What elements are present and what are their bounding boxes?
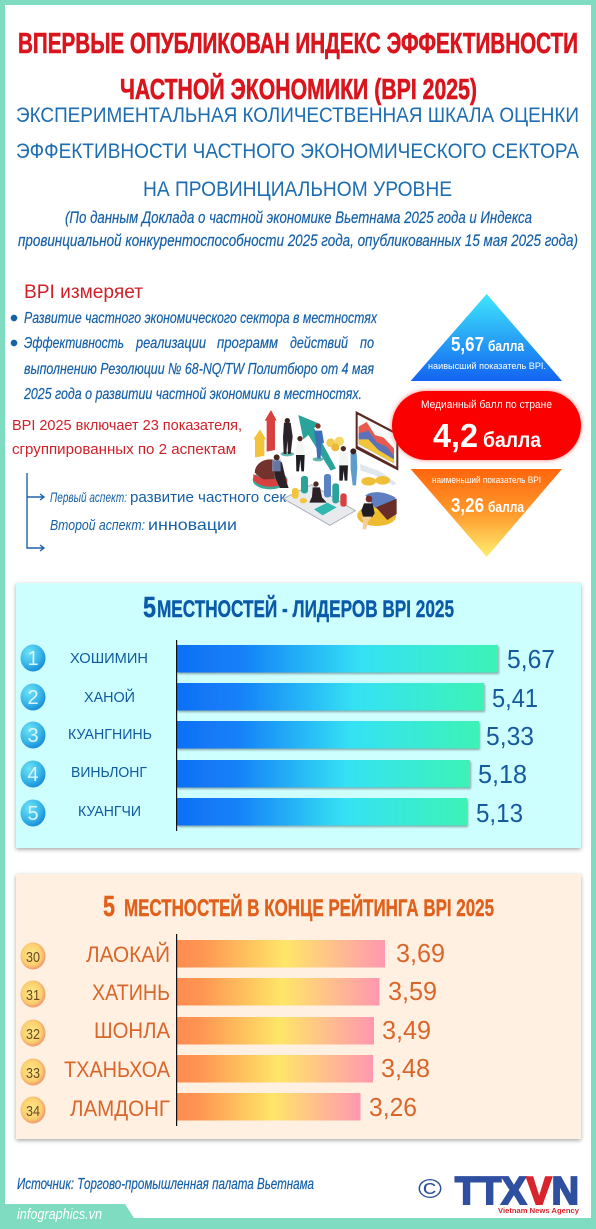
measures list: по: [360, 335, 374, 352]
logo: TTXVN: TTXVN: [455, 1170, 579, 1213]
measures list: Развитие частного экономического сектора в местностях: [24, 310, 378, 327]
rank badges: 30: [26, 949, 40, 966]
national median pill: 4,2: [433, 417, 478, 454]
locality names: ХАТИНЬ: [92, 980, 170, 1005]
rank badges: 3: [27, 725, 39, 747]
highest score triangle: [411, 294, 562, 381]
highest score triangle: 5,67: [451, 334, 484, 356]
panel: bottom 5 localities: [16, 874, 581, 1139]
title: ЧАСТНОЙ ЭКОНОМИКИ (BPI 2025): [120, 72, 477, 106]
bar chart: bottom 5: [176, 934, 385, 1126]
values: top 5: 5,33: [486, 721, 534, 751]
lowest score triangle: [411, 469, 562, 557]
aspects text: [50, 489, 286, 534]
rank badges: 2: [27, 687, 39, 709]
rank badges: 4: [27, 764, 39, 786]
bar chart: top 5: [176, 640, 498, 831]
national median pill: [392, 391, 581, 460]
measures list: [11, 310, 378, 403]
BPI 2025 indicators note: BPI 2025 включает 23 показателя,: [12, 417, 242, 434]
values: bottom 5: 3,59: [388, 976, 437, 1006]
BPI 2025 indicators note: сгруппированных по 2 аспектам: [12, 441, 236, 458]
locality names: [68, 650, 152, 820]
values: bottom 5: [369, 938, 445, 1122]
rank badges: [20, 942, 46, 1124]
heading: top 5: МЕСТНОСТЕЙ - ЛИДЕРОВ BPI 2025: [157, 595, 454, 623]
locality names: ЛАМДОНГ: [70, 1096, 170, 1121]
values: bottom 5: 3,48: [381, 1053, 430, 1083]
highest score triangle: наивысший показатель BPI.: [428, 361, 546, 371]
lowest score triangle: наименьший показатель BPI: [432, 475, 541, 485]
subtitle: НА ПРОВИНЦИАЛЬНОМ УРОВНЕ: [143, 178, 452, 201]
rank badges: [20, 644, 46, 826]
rank badges: 34: [26, 1103, 40, 1120]
rank badges: 1: [27, 648, 39, 670]
measures list: Эффективность: [24, 335, 124, 352]
heading: top 5: [143, 592, 454, 624]
values: top 5: 5,41: [492, 683, 538, 713]
measures list: программ: [217, 335, 278, 352]
locality names: КУАНГНИНЬ: [68, 726, 152, 743]
heading: bottom 5: [103, 891, 494, 923]
copyright symbol: ©: [418, 1174, 442, 1204]
heading: bottom 5: 5: [103, 891, 115, 923]
locality names: ВИНЬЛОНГ: [71, 764, 147, 781]
aspects text: развитие частного сек: [130, 489, 286, 506]
heading: top 5: 5: [143, 592, 156, 624]
locality names: ЛАОКАЙ: [86, 942, 170, 967]
locality names: ТХАНЬХОА: [64, 1057, 170, 1082]
values: top 5: 5,13: [476, 798, 523, 828]
values: bottom 5: 3,49: [382, 1015, 431, 1045]
values: top 5: [476, 644, 555, 828]
subtitle: [16, 104, 579, 201]
measures list: реализации: [135, 335, 206, 352]
aspects text: Второй аспект:: [50, 517, 145, 534]
rank badges: 33: [26, 1065, 40, 1082]
values: bottom 5: 3,69: [396, 938, 445, 968]
measures list: действий: [290, 335, 348, 352]
locality names: ХОШИМИН: [70, 650, 148, 667]
rank badges: 32: [26, 1026, 40, 1043]
source note under the subtitle: [18, 208, 578, 250]
aspects bracket with arrows: [27, 473, 44, 551]
highest score triangle: балла: [488, 338, 525, 355]
footer tab: infographics.vn: [17, 1206, 102, 1223]
rank badges: 31: [26, 987, 40, 1004]
lowest score triangle: балла: [488, 499, 525, 516]
BPI 2025 indicators note: [12, 417, 242, 458]
title: [18, 28, 578, 106]
footer tab: [0, 1204, 134, 1229]
source line: Источник: Торгово-промышленная палата Вьетнама: [17, 1176, 314, 1193]
logo: TTXVN: Vietnam News Agency: [498, 1206, 580, 1215]
aspects text: инновации: [148, 517, 237, 534]
locality names: [64, 942, 170, 1121]
national median pill: Медианный балл по стране: [421, 399, 552, 411]
panel: top 5 localities: [16, 583, 581, 848]
locality names: КУАНГЧИ: [78, 803, 141, 820]
national median pill: балла: [483, 429, 541, 452]
values: top 5: 5,18: [478, 759, 527, 789]
measures list: выполнению Резолюции № 68-NQ/TW Политбюро от 4 мая: [24, 361, 374, 378]
measures list: 2025 года о развитии частной экономики в местностях.: [23, 386, 362, 403]
values: top 5: 5,67: [507, 644, 555, 674]
illustration: business people and charts: [253, 410, 398, 529]
locality names: ШОНЛА: [94, 1018, 170, 1043]
rank badges: 5: [27, 803, 39, 825]
locality names: ХАНОЙ: [84, 688, 135, 706]
heading: BPI measures: BPI измеряет: [24, 282, 143, 303]
aspects text: Первый аспект:: [50, 489, 127, 505]
lowest score triangle: 3,26: [451, 495, 484, 517]
values: bottom 5: 3,26: [369, 1092, 417, 1122]
